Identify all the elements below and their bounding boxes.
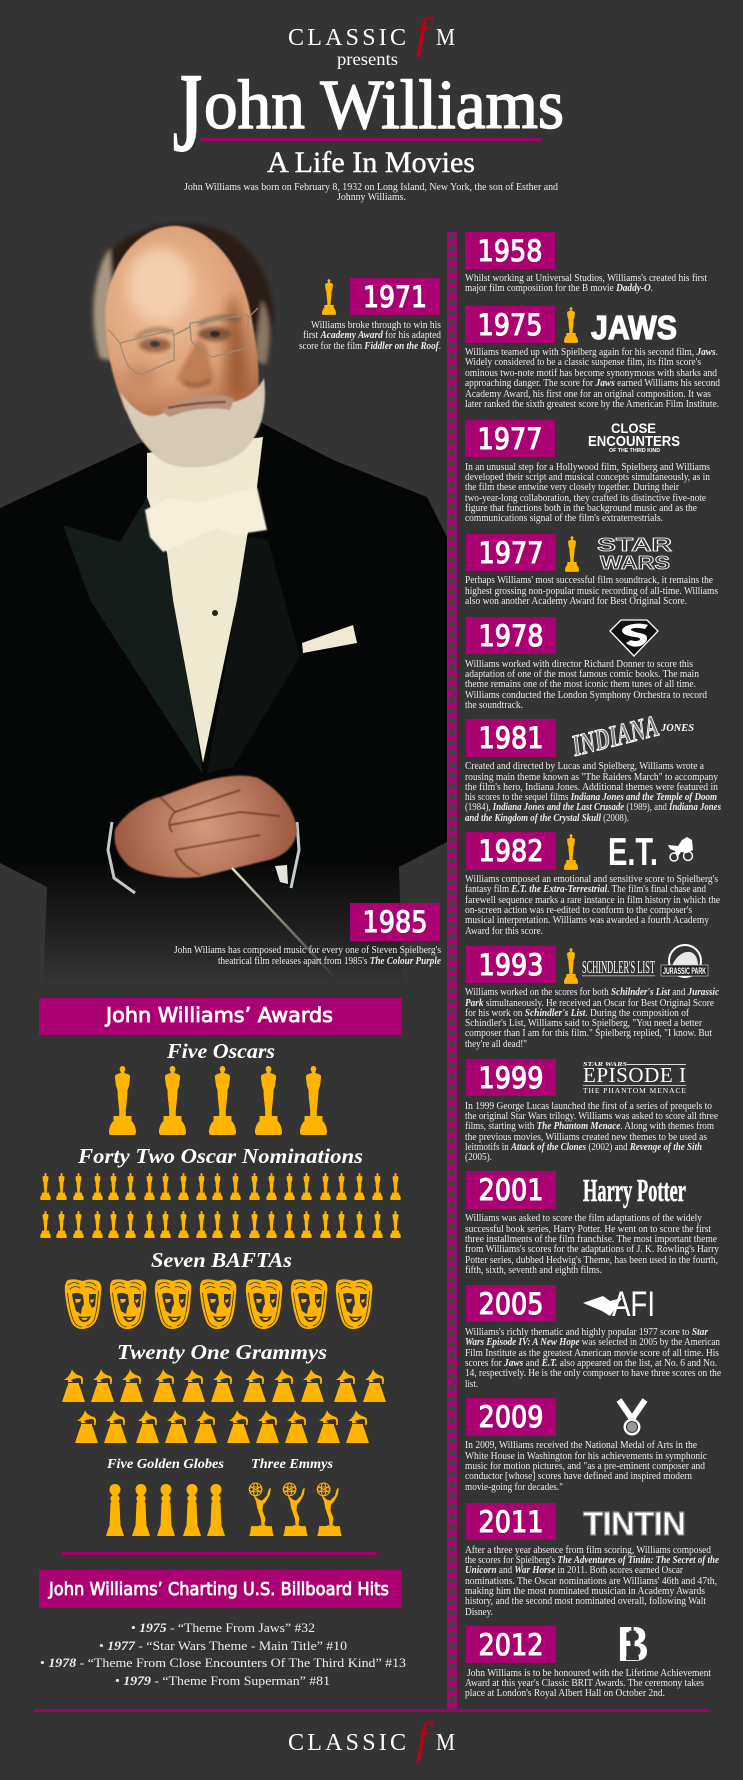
year badge 1971: 1971: [363, 280, 427, 314]
1978 text: the soundtrack.: [465, 700, 523, 711]
1978 entry: [465, 617, 708, 711]
Seven BAFTAs heading: Seven BAFTAs: [151, 1248, 292, 1272]
seven BAFTA mask icons: [65, 1279, 372, 1329]
footer: Classic FM logo: M: [436, 1730, 455, 1756]
2001 text: Williams was asked to score the film adaptations of the widely: [465, 1213, 703, 1224]
1958 text: Whilst working at Universal Studios, Williams's created his first: [465, 273, 707, 284]
intro text: [184, 182, 559, 203]
1975 text: Widely considered to be a classic suspense film, its film score's: [465, 357, 701, 368]
2012 text: John Williams is to be honoured with the Lifetime Achievement: [467, 1668, 711, 1679]
eyes, brows and nose: [136, 317, 240, 386]
title: John Williams: ohn Williams: [204, 67, 564, 144]
1978 text: adaptation of one of the most famous comic books. The main: [465, 669, 700, 680]
footer: Classic FM logo: [288, 1714, 455, 1763]
Five Oscars heading: Five Oscars: [166, 1039, 275, 1063]
Forty Two Oscar Nominations heading: Forty Two Oscar Nominations: [77, 1144, 363, 1168]
conductor's baton: [232, 868, 337, 980]
beard: [120, 378, 265, 468]
2001 text: successful book series, Harry Potter. He went on to score the first: [465, 1224, 711, 1235]
twenty one grammy icons: [62, 1369, 386, 1443]
1977 text: communications signal of the film's extraterrestrials.: [465, 513, 663, 524]
2009 text: White House in Washington for his achievements in symphonic: [465, 1451, 707, 1462]
year badge 1985: 1985: [362, 905, 428, 939]
1977 text: figure that functions both in the background music and as the: [465, 503, 697, 514]
subtitle: A Life In Movies: A Life In Movies: [267, 146, 475, 179]
1958 entry: [465, 232, 707, 294]
left cuff: [108, 822, 135, 893]
presents: presents: [337, 49, 398, 69]
2012 text: [465, 1668, 711, 1699]
logo: Schindler's List: [582, 957, 655, 977]
1975 text: ominous two-note motif has become synonymous with sharks and: [465, 368, 718, 379]
1971 text: [299, 320, 442, 352]
1977 text: the film these entwine very closely together. During their: [465, 482, 679, 493]
year badge 2009: 2009: [478, 1400, 544, 1434]
1993 text: for his work on Schindler's List. During the composition of: [465, 1008, 689, 1019]
2011 text: history, and the second most nominated overall, following Walt: [465, 1596, 706, 1607]
1981 text: Created and directed by Lucas and Spielberg, Williams wrote a: [465, 761, 704, 772]
1981 text: (1984), Indiana Jones and the Last Crusade (1989), and Indiana Jones: [465, 802, 721, 813]
logo: AFI: [583, 1285, 655, 1324]
year badge 2005: 2005: [478, 1287, 544, 1321]
2009 text: music for motion pictures, and "as a pre-eminent composer and: [465, 1461, 706, 1472]
finger lines: [160, 790, 280, 875]
year badge 1977: 1977: [478, 536, 544, 570]
right lapel: [207, 537, 300, 773]
three emmy icons: [249, 1483, 342, 1536]
2005 entry: [465, 1285, 721, 1390]
1993 entry: SCHINDLER'S LIST: [582, 957, 655, 977]
2009 text: conductor [whose] scores have defined and inspired modern: [465, 1471, 693, 1482]
logo: Episode I: STAR WARS: [583, 1061, 627, 1068]
2009 text: movie-going for decades.": [465, 1482, 563, 1493]
2001 entry: [465, 1171, 720, 1276]
year badge 1977: 1977: [478, 422, 542, 456]
portrait of John Williams: [0, 224, 447, 990]
1971 text: Williams broke through to win his: [311, 320, 441, 331]
1977 Star Wars text: also won another Academy Award for Best Original Score.: [465, 596, 687, 607]
film strip timeline: [447, 232, 457, 1709]
2005 text: Film Institute as the greatest American movie score of all time. His: [465, 1348, 719, 1359]
year badge 2011: 2011: [478, 1505, 544, 1539]
logo: Star Wars: STAR: [597, 535, 672, 555]
1971 text: first Academy Award for his adapted: [303, 330, 442, 341]
2011 text: the scores for Spielberg's The Adventures of Tintin: The Secret of the: [465, 1555, 719, 1566]
year badge 2012: 2012: [478, 1628, 544, 1662]
icon: oscar: [564, 948, 578, 984]
1975 text: Williams teamed up with Spielberg again for his second film, Jaws.: [465, 347, 718, 358]
1993 entry: [465, 945, 719, 1050]
2011 entry: [465, 1503, 719, 1618]
1982 text: musical interpretation. Williams was awarded a fourth Academy: [465, 915, 710, 926]
jacket: [0, 423, 447, 990]
2001 text: three installments of the film franchise. The most important theme: [465, 1234, 717, 1245]
2009 text: [465, 1440, 707, 1493]
pocket square: [302, 625, 357, 653]
1971 text: score for the film Fiddler on the Roof.: [299, 341, 441, 352]
year badge 1958: 1958: [478, 234, 542, 268]
header: Classic FM logo: f: [416, 9, 434, 58]
1975 text: later ranked the sixth greatest score by the American Film Institute.: [465, 399, 719, 410]
1975 text: Academy Award, his first one for an original composition. It was: [465, 389, 711, 400]
shirt stud: [212, 610, 218, 616]
face: [105, 226, 259, 432]
2011 text: [465, 1545, 719, 1618]
billboard list: • 1978 - “Theme From Close Encounters Of The Third Kind” #13: [40, 1655, 406, 1670]
1971 entry: [299, 278, 442, 352]
icon: oscar: [565, 536, 579, 572]
1977 Star Wars text: highest grossing non-popular music recording of all-time. Williams: [465, 586, 718, 597]
awards heading: John Williams’ Awards: [104, 1003, 333, 1027]
1975 entry: [465, 306, 721, 410]
header: Classic FM logo: M: [436, 25, 455, 51]
1993 text: [465, 987, 719, 1050]
1977 Star Wars entry: [465, 534, 718, 607]
billboard list: • 1975 - “Theme From Jaws” #32: [131, 1620, 315, 1635]
1981 text: and the Kingdom of the Crystal Skull (2008).: [465, 813, 629, 824]
hair: [92, 224, 274, 365]
moustache and mouth: [162, 395, 234, 417]
billboard heading: John Williams’ Charting U.S. Billboard Hits: [48, 1579, 389, 1600]
1982 text: on-screen action was re-edited to conform to the composer's: [465, 905, 692, 916]
2001 text: from Williams's scores for the adaptations of J. K. Rowling's Harry: [465, 1244, 720, 1255]
icon: E.T. bicycle: [668, 837, 693, 861]
intro text: John Williams was born on February 8, 1932 on Long Island, New York, the son of Esther and: [184, 182, 559, 193]
logo: AFI: AFI: [612, 1285, 655, 1324]
year badge 1975: 1975: [478, 308, 542, 342]
2011 text: nominations. The Oscar nominations are Williams' 46th and 47th,: [465, 1576, 717, 1587]
year badge 1978: 1978: [478, 619, 544, 653]
logo: Episode I: THE PHANTOM MENACE: [583, 1086, 686, 1095]
1977 Star Wars text: Perhaps Williams' most successful film soundtrack, it remains the: [465, 575, 713, 586]
1985 text: John Wiliams has composed music for every one of Steven Spielberg's: [174, 945, 441, 956]
icon: oscar: [322, 279, 336, 315]
1978 text: theme remains one of the most iconic them tunes of all time.: [465, 679, 696, 690]
forty two oscar icons: [40, 1173, 401, 1238]
billboard list: [40, 1620, 406, 1688]
face shading: [124, 249, 248, 400]
1978 text: Williams worked with director Richard Donner to score this: [465, 659, 693, 670]
1975 text: approaching danger. The score for Jaws earned Williams his second: [465, 378, 721, 389]
logo: Close Encounters: ENCOUNTERS: [588, 434, 680, 450]
2009 entry: [465, 1398, 707, 1493]
logo: E.T.: E.T.: [608, 831, 658, 874]
1999 text: [465, 1101, 718, 1163]
logo: Star Wars: WARS: [600, 553, 670, 573]
2011 text: After a three year absence from film scoring, Williams composed: [465, 1545, 712, 1556]
icon: medal of arts: [619, 1400, 645, 1436]
1999 text: the original Star Wars trilogy. Williams was asked to score all three: [465, 1111, 718, 1122]
panel: billboard hits: [39, 1570, 406, 1688]
icon: oscar: [564, 834, 578, 870]
year badge 1999: 1999: [478, 1061, 544, 1095]
five golden globe icons: [106, 1484, 225, 1536]
1993 text: they're all dead!": [465, 1039, 527, 1050]
2005 text: list.: [465, 1379, 478, 1390]
1993 text: Schindler's List, Williams said to Spielberg, "You need a better: [465, 1018, 702, 1029]
2005 text: Williams's richly thematic and highly popular 1977 score to Star: [465, 1327, 709, 1338]
1999 text: films, starting with The Phantom Menace. Along with themes from: [465, 1121, 714, 1132]
right cuff: [275, 822, 299, 888]
1985 entry: [174, 903, 441, 967]
logo: Superman: [610, 620, 658, 656]
billboard heading: [39, 1570, 402, 1608]
1977 text: In an unusual step for a Hollywood film, Spielberg and Williams: [465, 462, 710, 473]
2012 text: Award at this year's Classic BRIT Awards. The ceremony takes: [465, 1678, 704, 1689]
1958 text: [465, 273, 707, 294]
1977 Star Wars text: [465, 575, 718, 607]
year badge 1982: 1982: [478, 834, 544, 868]
1999 text: (2005).: [465, 1152, 492, 1163]
left lapel: [63, 497, 203, 775]
2012 entry: [465, 1618, 711, 1699]
shirt: [147, 437, 263, 763]
2005 text: Wars Episode IV: A New Hope was selected in 2005 by the American: [465, 1337, 721, 1348]
1981 entry: [465, 709, 721, 824]
1958 text: major film composition for the B movie Daddy-O.: [465, 283, 653, 294]
pupils: [150, 331, 220, 347]
2009 text: In 2009, Williams received the National Medal of Arts in the: [465, 1440, 697, 1451]
billboard list: • 1977 - “Star Wars Theme - Main Title” #10: [99, 1638, 347, 1653]
logo: Tintin: TINTIN: [583, 1505, 686, 1542]
logo: Star Wars: [597, 535, 672, 573]
1977 Close Encounters entry: [465, 420, 711, 524]
1985 text: theatrical film releases apart from 1985's The Colour Purple: [218, 956, 441, 967]
five oscar icons: [109, 1066, 327, 1135]
hands: [115, 776, 297, 878]
1975 text: [465, 347, 721, 410]
1982 text: farewell sequence marks a rare instance in film history in which the: [465, 895, 720, 906]
title underline: [201, 138, 542, 141]
year badge 1981: 1981: [478, 721, 544, 755]
2005 text: [465, 1327, 721, 1390]
logo: Jaws: JAWS: [591, 309, 677, 346]
1982 text: Williams composed an emotional and sensitive score to Spielberg's: [465, 874, 718, 885]
1981 text: rousing main theme known as "The Raiders March" to accompany: [465, 772, 719, 783]
1977 text: developed their script and musical concepts simultaneously, as in: [465, 472, 711, 483]
logo: Indiana Jones: JONES: [660, 722, 694, 734]
1981 text: the film's hero, Indiana Jones. Additional themes were featured in: [465, 782, 719, 793]
footer: Classic FM logo: f: [416, 1714, 434, 1763]
2011 text: Disney.: [465, 1607, 493, 1618]
1982 text: Award for this score.: [465, 926, 543, 937]
icon: oscar: [564, 307, 578, 343]
bow tie: [145, 487, 267, 552]
1982 text: fantasy film E.T. the Extra-Terrestrial. The film's final chase and: [465, 884, 707, 895]
1993 text: Park simultaneously. He received an Oscar for Best Original Score: [465, 998, 714, 1009]
2011 text: making him the most nominated musician in Academy Awards: [465, 1586, 705, 1597]
1999 text: the previous movies, Williams created new themes to be used as: [465, 1132, 707, 1143]
year badge 2001: 2001: [478, 1173, 544, 1207]
logo: Jurassic Park: JURASSIC PARK: [663, 966, 706, 977]
logo: Close Encounters: CLOSE: [611, 420, 656, 436]
1981 text: [465, 761, 721, 824]
2001 text: fifth, sixth, seventh and eighth films.: [465, 1265, 602, 1276]
glasses: [108, 308, 258, 374]
1999 text: leitmotifs in Attack of the Clones (2002) and Revenge of the Sith: [465, 1142, 702, 1153]
logo: Classic BRIT Awards: B: [617, 1618, 649, 1672]
1977 text: [465, 462, 711, 524]
logo: Episode I: EPISODE I: [583, 1063, 686, 1087]
1993 text: Williams worked on the scores for both Schilnder's List and Jurassic: [465, 987, 719, 998]
2012 text: place at London's Royal Albert Hall on October 2nd.: [465, 1688, 665, 1699]
header: Classic FM logo: [288, 9, 455, 58]
intro text: Johnny Williams.: [337, 192, 406, 203]
1982 entry: [465, 831, 720, 937]
Twenty One Grammys heading: Twenty One Grammys: [117, 1340, 327, 1364]
Five Golden Globes heading: Five Golden Globes: [106, 1457, 225, 1472]
panel: awards: [39, 998, 402, 1536]
title: John Williams: [171, 50, 564, 176]
logo: Close Encounters: [588, 420, 680, 454]
1978 text: [465, 659, 708, 711]
1999 entry: [465, 1059, 718, 1163]
logo: Jurassic Park: [661, 945, 708, 977]
2005 text: scores for Jaws and E.T. also appeared on the list, at No. 6 and No.: [465, 1358, 717, 1369]
2011 text: Unicorn and War Horse in 2011. Both scores earned Oscar: [465, 1565, 683, 1576]
logo: Indiana Jones: INDIANA: [568, 709, 662, 763]
header: Classic FM logo: CLASSIC: [288, 25, 406, 51]
logo: Close Encounters: OF THE THIRD KIND: [609, 448, 660, 454]
1977 text: two-year-long collaboration, they crafted its distinctive five-note: [465, 493, 706, 504]
Three Emmys heading: Three Emmys: [251, 1457, 334, 1472]
1985 text: [174, 945, 441, 967]
1982 text: [465, 874, 720, 937]
1999 text: In 1999 George Lucas launched the first of a series of prequels to: [465, 1101, 712, 1112]
1978 text: Williams conducted the London Symphony Orchestra to record: [465, 690, 708, 701]
awards heading: [39, 998, 402, 1035]
year badge 1993: 1993: [478, 948, 544, 982]
1993 text: composer than I am for this film." Spielberg replied, "I know. But: [465, 1028, 712, 1039]
billboard list: • 1979 - “Theme From Superman” #81: [115, 1673, 330, 1688]
2005 text: 14, respectively. He is the only composer to have three scores on the: [465, 1368, 721, 1379]
2001 text: [465, 1213, 720, 1276]
1981 text: his scores to the sequel films Indiana Jones and the Temple of Doom: [465, 792, 717, 803]
2001 text: Potter series, dubbed Hedwig's Theme, has been used in the fourth,: [465, 1255, 718, 1266]
footer: Classic FM logo: CLASSIC: [288, 1730, 406, 1756]
title: John Williams: J: [171, 50, 203, 176]
